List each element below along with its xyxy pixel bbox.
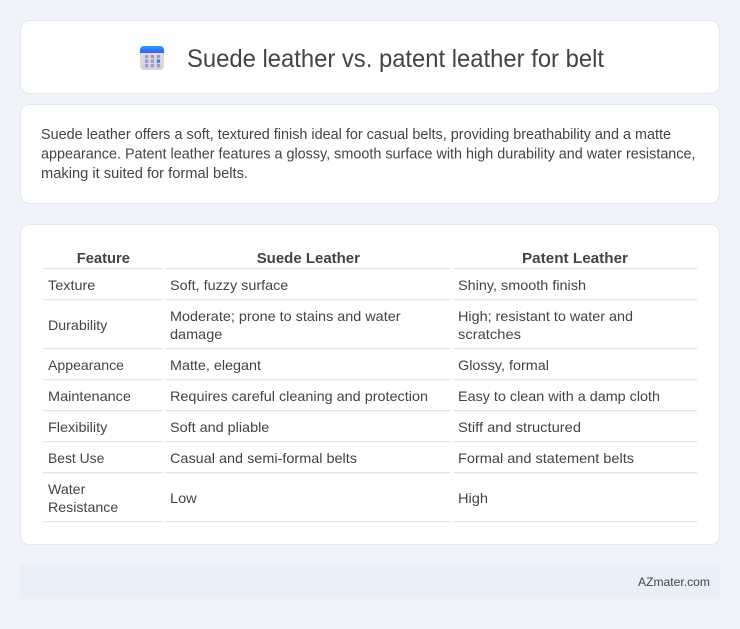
icon: calendar <box>140 46 164 70</box>
table header row: Patent Leather <box>522 250 628 267</box>
row: texture: Soft, fuzzy surface <box>170 277 289 293</box>
table header row: Feature <box>77 250 130 267</box>
row: flexibility: Soft and pliable <box>170 419 270 435</box>
row: durability: Durability <box>48 317 107 333</box>
row: flexibility <box>43 419 697 442</box>
row: durability: scratches <box>458 326 521 342</box>
row: flexibility: Stiff and structured <box>458 419 581 435</box>
row: maintenance: Requires careful cleaning and protection <box>170 388 428 404</box>
row: water resistance: Low <box>170 490 198 506</box>
row: appearance: Glossy, formal <box>458 357 549 373</box>
panel: comparison table card <box>20 224 720 544</box>
table header row: Suede Leather <box>257 250 360 267</box>
row: durability: Moderate; prone to stains and water <box>170 308 401 324</box>
row: maintenance: Maintenance <box>48 388 131 404</box>
row: texture: Texture <box>48 277 96 293</box>
row: water resistance <box>43 481 697 522</box>
description text: appearance. Patent leather features a glossy, smooth surface with high durability and water resistance, <box>41 146 696 162</box>
table header row <box>43 250 697 269</box>
description text: Suede leather offers a soft, textured finish ideal for casual belts, providing breathability and a matte <box>41 127 671 143</box>
footer source text: AZmater.com <box>638 575 710 589</box>
row: best use: Casual and semi-formal belts <box>170 450 357 466</box>
row: durability: damage <box>170 326 223 342</box>
row: durability <box>43 308 697 349</box>
row: water resistance: High <box>458 490 488 506</box>
panel: title card <box>20 20 720 94</box>
row: texture <box>43 277 697 300</box>
row: maintenance <box>43 388 697 411</box>
panel: description card <box>20 104 720 204</box>
row: durability: High; resistant to water and <box>458 308 633 324</box>
row: appearance <box>43 357 697 380</box>
row: maintenance: Easy to clean with a damp cloth <box>458 388 660 404</box>
row: best use: Best Use <box>48 450 104 466</box>
title: Suede leather vs. patent leather for belt <box>187 45 604 73</box>
description text: making it suited for formal belts. <box>41 166 248 182</box>
row: flexibility: Flexibility <box>48 419 107 435</box>
row: best use: Formal and statement belts <box>458 450 634 466</box>
row: best use <box>43 450 697 473</box>
footer bar <box>20 565 720 599</box>
row: appearance: Matte, elegant <box>170 357 261 373</box>
row: appearance: Appearance <box>48 357 124 373</box>
description text <box>41 127 696 182</box>
row: water resistance: Water <box>48 481 86 497</box>
row: water resistance: Resistance <box>48 499 119 515</box>
row: texture: Shiny, smooth finish <box>458 277 586 293</box>
